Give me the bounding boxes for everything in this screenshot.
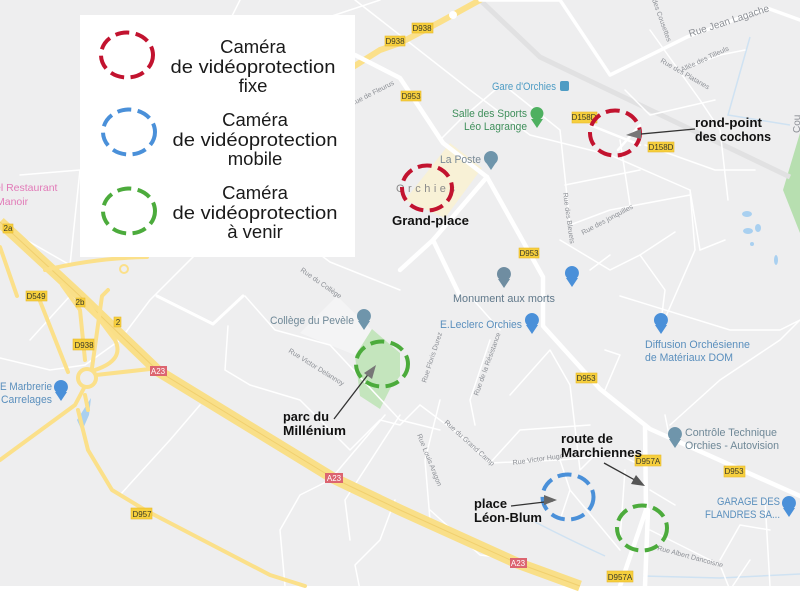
place labels: E.Leclerc Orchies	[440, 319, 522, 331]
street names: Rue Jean Lagache	[688, 3, 771, 40]
marker: rond-point des cochons	[590, 110, 771, 156]
legend item: fixed camera: de vidéoprotection	[170, 56, 336, 77]
main road D953	[157, 0, 800, 586]
place labels: de Matériaux DOM	[645, 352, 733, 364]
road shields: 2	[116, 318, 121, 327]
place labels	[0, 81, 780, 521]
road shields: A23	[151, 367, 166, 376]
marker: parc du Millénium: parc du	[283, 409, 329, 424]
place labels: Orchies - Autovision	[685, 440, 779, 452]
large green area	[783, 133, 800, 233]
place labels: Monument aux morts	[453, 293, 555, 305]
legend item: fixed camera: Caméra	[220, 36, 287, 57]
marker: place Léon-Blum	[474, 474, 594, 525]
place labels: GARAGE DES	[717, 496, 780, 508]
railway	[480, 0, 790, 177]
legend item: mobile camera: de vidéoprotection	[172, 129, 338, 150]
road shields: D158D	[572, 113, 597, 122]
road shields: D957A	[608, 573, 633, 582]
road shields: A23	[327, 474, 342, 483]
road shields: D938	[385, 37, 405, 46]
place labels: Salle des Sports	[452, 108, 527, 120]
legend item: mobile camera: mobile	[228, 148, 282, 169]
place labels: La Poste	[440, 154, 481, 166]
school grounds	[300, 296, 372, 355]
marker: route de Marchiennes: route de	[561, 431, 613, 446]
marker: Grand-place	[392, 166, 469, 228]
road shields: 2a	[4, 224, 13, 233]
road shields: D549	[26, 292, 46, 301]
place labels: Gare d'Orchies	[492, 81, 556, 93]
street names: Allée des Tilleuls	[680, 45, 731, 74]
road shields: D938	[74, 341, 94, 350]
marker: rond-point des cochons: des cochons	[695, 129, 771, 144]
road shields: D953	[401, 92, 421, 101]
marker: route de Marchiennes	[561, 431, 667, 550]
road shields: 2b	[76, 298, 85, 307]
place labels: Diffusion Orchésienne	[645, 339, 750, 351]
marker: place Léon-Blum: place	[474, 496, 507, 511]
road shields: D957A	[636, 457, 661, 466]
road shields: D957	[132, 510, 152, 519]
street names: Rue Floris Durez	[421, 331, 444, 384]
marker: route de Marchiennes: Marchiennes	[561, 445, 642, 460]
street names: Rue Victor Hugo	[512, 453, 564, 467]
legend panel	[80, 15, 355, 257]
street names: Rue de Fleurus	[350, 80, 396, 108]
road shields: D953	[576, 374, 596, 383]
legend item: upcoming camera	[103, 182, 338, 242]
place labels: Collège du Pevèle	[270, 315, 354, 327]
street names: Rue du Collège	[299, 267, 342, 300]
place labels: Orchies	[396, 183, 458, 195]
street names	[287, 0, 800, 569]
legend item: upcoming camera: de vidéoprotection	[172, 202, 338, 223]
road shields: D938	[412, 24, 432, 33]
street names: Rue du Grand Camp	[443, 419, 495, 468]
street names: Rue Albert Dancoisne	[656, 545, 724, 569]
legend item: upcoming camera: à venir	[227, 221, 283, 242]
street names: Rue des Platanes	[659, 58, 711, 92]
legend item: mobile camera: Caméra	[222, 109, 289, 130]
marker: place Léon-Blum: Léon-Blum	[474, 510, 542, 525]
street names: Rue Victor Delannoy	[287, 348, 345, 388]
place labels: FLANDRES SA...	[705, 509, 780, 521]
marker: parc du Millénium: Millénium	[283, 423, 346, 438]
road D938 north	[353, 0, 480, 67]
interchange roads	[0, 247, 305, 586]
marker: parc du Millénium	[283, 342, 408, 438]
street names: Rue des jonquilles	[581, 203, 635, 237]
street names: Rue de la Résistance	[473, 332, 503, 397]
marker: rond-point des cochons: rond-point	[695, 115, 763, 130]
place labels: Carrelages	[1, 394, 52, 406]
legend item: upcoming camera: Caméra	[222, 182, 289, 203]
road shields: A23	[511, 559, 526, 568]
road shields: D158D	[649, 143, 674, 152]
place labels: Contrôle Technique	[685, 427, 777, 439]
map pins	[54, 81, 796, 517]
legend item: fixed camera	[101, 32, 336, 96]
street names: Rue des Bleuets	[561, 192, 575, 245]
road shields: D953	[519, 249, 539, 258]
place labels: E Marbrerie	[0, 381, 52, 393]
marker: Grand-place: Grand-place	[392, 213, 469, 228]
legend item: fixed camera: fixe	[239, 75, 267, 96]
motorway A23	[0, 222, 580, 586]
town centre area	[405, 143, 482, 218]
park: parc du Millénium	[355, 329, 400, 409]
legend item: mobile camera	[103, 109, 338, 169]
street names: Rue Louis Aragon	[415, 433, 443, 487]
road shields: D953	[724, 467, 744, 476]
place labels: Léo Lagrange	[464, 121, 527, 133]
